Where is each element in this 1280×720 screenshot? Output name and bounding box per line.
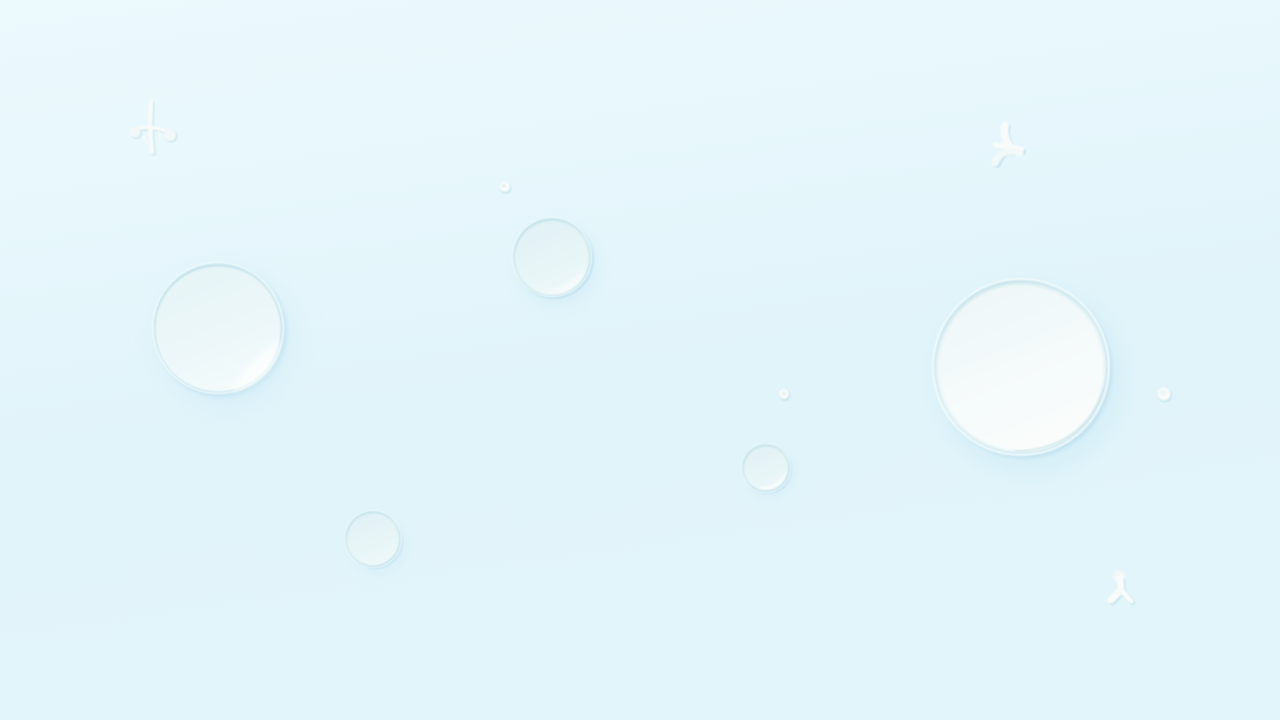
droplet highlight <box>756 472 786 489</box>
droplet: left large <box>152 262 294 408</box>
splash: lower right <box>1111 570 1132 602</box>
droplet rim reflection <box>1015 388 1104 451</box>
dot: far right <box>1158 388 1172 402</box>
droplet: right largest <box>932 278 1122 472</box>
splash: upper right <box>995 126 1022 164</box>
dot: centre right <box>779 389 790 401</box>
droplet: lower left small <box>344 510 407 574</box>
droplet highlight <box>232 340 280 391</box>
dot: upper centre <box>500 182 512 194</box>
droplet: upper centre <box>512 217 600 308</box>
droplet: lower centre small <box>741 443 795 498</box>
splash: upper left <box>130 102 178 154</box>
droplet highlight <box>538 268 584 293</box>
